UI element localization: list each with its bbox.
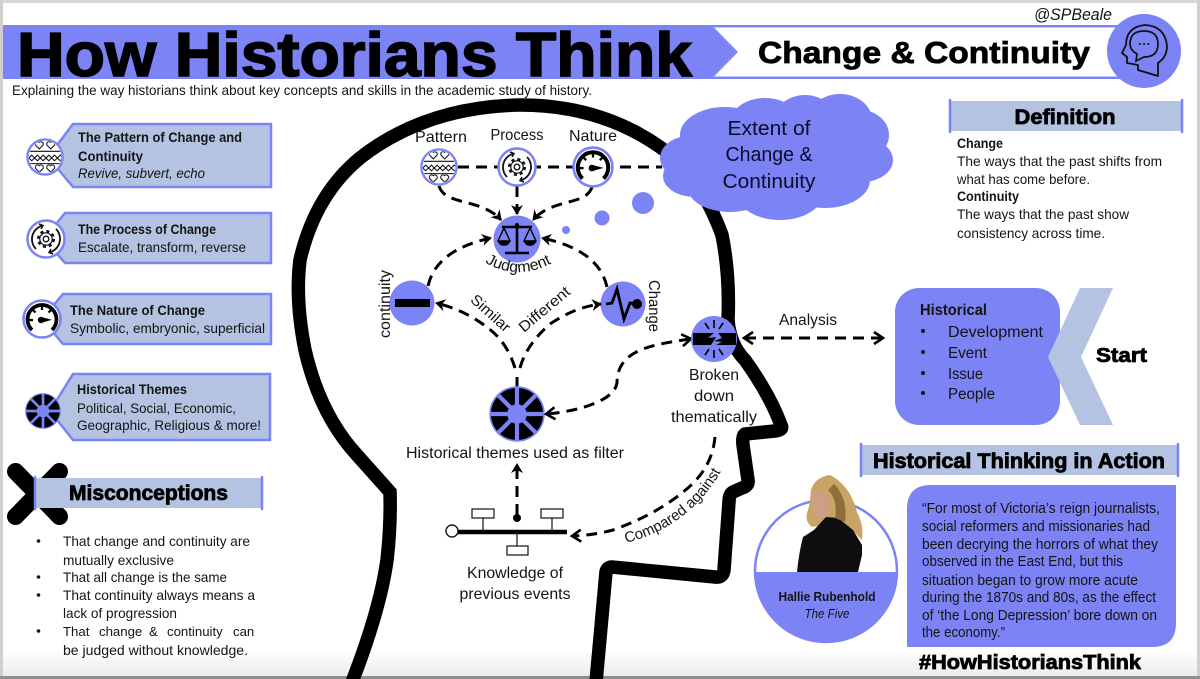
cloud text: [722, 118, 816, 193]
icon: thinking head: [1107, 14, 1181, 88]
quote text: “For most of Victoria’s reign journalists,: [922, 501, 1160, 517]
panel: historical themes: [26, 374, 270, 440]
label: continuity: continuity: [377, 270, 394, 338]
box list: People: [948, 386, 995, 403]
label: knowledge: [460, 565, 570, 603]
label: change: Change: [645, 280, 662, 332]
panel: historical start box: [895, 288, 1113, 425]
icon: nature node: [574, 148, 612, 186]
label: judgment: Judgment: [486, 254, 552, 275]
label: start: Start: [1096, 345, 1147, 367]
misconceptions list: That continuity always means a: [63, 587, 255, 603]
panel text: nature: [70, 302, 265, 336]
connector: short stem above themes: [516, 377, 518, 388]
icon: process: [28, 220, 64, 258]
panel text: pattern: Continuity: [78, 148, 143, 164]
label: broken down: [671, 367, 757, 426]
connector: pattern to judgment: [439, 186, 501, 220]
misconceptions list: change: [99, 624, 142, 639]
label: compared against: Compared against: [625, 468, 721, 542]
definition text: consistency across time.: [957, 225, 1105, 241]
subtitle band: [711, 25, 1125, 79]
icon: judgment scales: [494, 216, 540, 262]
panel text: themes: Political, Social, Economic,: [77, 400, 236, 416]
connector: change to judgment: [542, 238, 607, 287]
author portrait: [755, 475, 897, 643]
connector: continuity to judgment: [428, 238, 491, 286]
connector: top row dashed line: [458, 166, 662, 168]
label: similar: Similar: [467, 291, 514, 336]
heading: misconceptions: [35, 477, 262, 509]
box list: Issue: [948, 366, 983, 383]
misconceptions list: can: [233, 624, 254, 639]
label: different: Different: [515, 283, 575, 336]
panel text: process: The Process of Change: [78, 221, 216, 237]
label: process: Process: [490, 127, 544, 144]
panel text: pattern: [78, 129, 242, 181]
panel: nature of change: [24, 294, 271, 344]
panel text: themes: Historical Themes: [77, 381, 187, 397]
quote text: been decrying the horrors of what they: [922, 537, 1159, 553]
connector: process to judgment: [516, 186, 518, 214]
box list: Development: [948, 324, 1044, 341]
icon: gauge: [24, 300, 60, 338]
heading: historical thinking in action: [861, 444, 1178, 476]
heading: misconceptions: Misconceptions: [69, 482, 228, 505]
connector: different: [520, 304, 601, 368]
chevron: [1048, 288, 1113, 425]
quote text: social reformers and missionaries had: [922, 519, 1150, 535]
definition text: Change: [957, 135, 1003, 151]
definition text: [956, 135, 1162, 241]
icon: pattern node: [421, 149, 457, 185]
definition text: The ways that the past shifts from: [957, 153, 1162, 169]
connector: nature to judgment: [533, 187, 592, 220]
icon: continuity node: [390, 280, 434, 326]
label: pattern: Pattern: [415, 129, 467, 146]
misconceptions list: That all change is the same: [63, 569, 227, 585]
cloud text: Continuity: [722, 171, 816, 193]
photo: historian: [797, 475, 862, 572]
cloud text: Change &: [726, 144, 813, 166]
misconceptions list: be judged without knowledge.: [63, 642, 248, 658]
quote text: situation began to grow more acute: [922, 573, 1138, 589]
label: broken down: thematically: [671, 409, 757, 426]
label: knowledge: Knowledge of: [467, 565, 564, 582]
panel text: themes: Geographic, Religious & more!: [77, 417, 261, 433]
author caption: Hallie Rubenhold: [778, 590, 876, 604]
box list: Event: [948, 345, 988, 362]
definition text: The ways that the past show: [957, 206, 1130, 222]
connector: compared against: [573, 437, 715, 536]
connector: analysis: [745, 336, 882, 340]
icon: themes wheel: [26, 394, 60, 428]
misconceptions list: continuity: [167, 624, 223, 639]
thought cloud: [660, 94, 893, 220]
definition text: what has come before.: [956, 171, 1090, 187]
quote text: the economy.”: [922, 625, 1005, 641]
icon: pattern: [27, 139, 63, 175]
panel text: process: Escalate, transform, reverse: [78, 239, 246, 255]
quote text: of ‘the Long Depression’ bore down on: [922, 608, 1157, 624]
panel text: nature: Symbolic, embryonic, superficial: [70, 320, 265, 336]
quote text: during the 1870s and 80s, as the effect: [922, 590, 1156, 606]
connector: knowledge to themes: [516, 464, 518, 515]
panel text: themes: [77, 381, 261, 433]
author caption: [778, 590, 876, 621]
icon: broken bar node: [691, 316, 737, 362]
label: nature: Nature: [569, 128, 617, 145]
heading: definition: Definition: [1014, 106, 1116, 129]
label: themes filter: Historical themes used as filter: [406, 445, 624, 462]
heading: definition: [950, 100, 1182, 132]
definition text: Continuity: [957, 188, 1019, 204]
heading: historical thinking in action: Historical Thinking in Action: [873, 450, 1165, 473]
box list: Historical: [920, 302, 987, 319]
author caption: The Five: [804, 607, 850, 621]
icon: timeline: [446, 509, 567, 555]
description line: Explaining the way historians think about key concepts and skills in the academic study of history.: [12, 82, 592, 98]
connector: similar: [436, 303, 515, 368]
icon: misconceptions cross: [16, 472, 60, 516]
icon: change node: [600, 282, 646, 326]
cloud text: Extent of: [728, 118, 811, 140]
panel text: pattern: Revive, subvert, echo: [78, 165, 205, 181]
panel text: nature: The Nature of Change: [70, 302, 205, 318]
label: analysis: Analysis: [779, 312, 837, 329]
misconceptions list: mutually exclusive: [63, 552, 174, 568]
box list: [920, 302, 1044, 403]
hashtag: #HowHistoriansThink: [919, 652, 1142, 674]
connector: broken to themes: [547, 339, 690, 414]
author handle: @SPBeale: [1034, 5, 1112, 24]
icon: themes node: [490, 387, 544, 441]
panel text: process: [78, 221, 246, 255]
label: broken down: Broken: [689, 367, 739, 384]
panel: process of change: [28, 213, 271, 263]
misconceptions list: [37, 533, 255, 658]
subtitle: Change & Continuity: [758, 35, 1091, 70]
panel text: pattern: The Pattern of Change and: [78, 129, 242, 145]
misconceptions list: That: [63, 624, 90, 639]
quote text: observed in the East End, but this: [922, 554, 1123, 570]
label: broken down: down: [694, 388, 734, 405]
title: How Historians Think: [17, 21, 693, 90]
misconceptions list: lack of progression: [63, 605, 177, 621]
head outline: [298, 105, 782, 679]
thought bubbles: [562, 192, 654, 234]
quote box: [907, 485, 1176, 647]
icon: process node: [498, 148, 536, 186]
misconceptions list: &: [149, 624, 158, 639]
misconceptions list: That change and continuity are: [63, 533, 250, 549]
title banner: [3, 21, 736, 90]
quote text: [922, 501, 1160, 641]
label: knowledge: previous events: [460, 586, 570, 603]
panel: pattern of change: [27, 124, 271, 187]
